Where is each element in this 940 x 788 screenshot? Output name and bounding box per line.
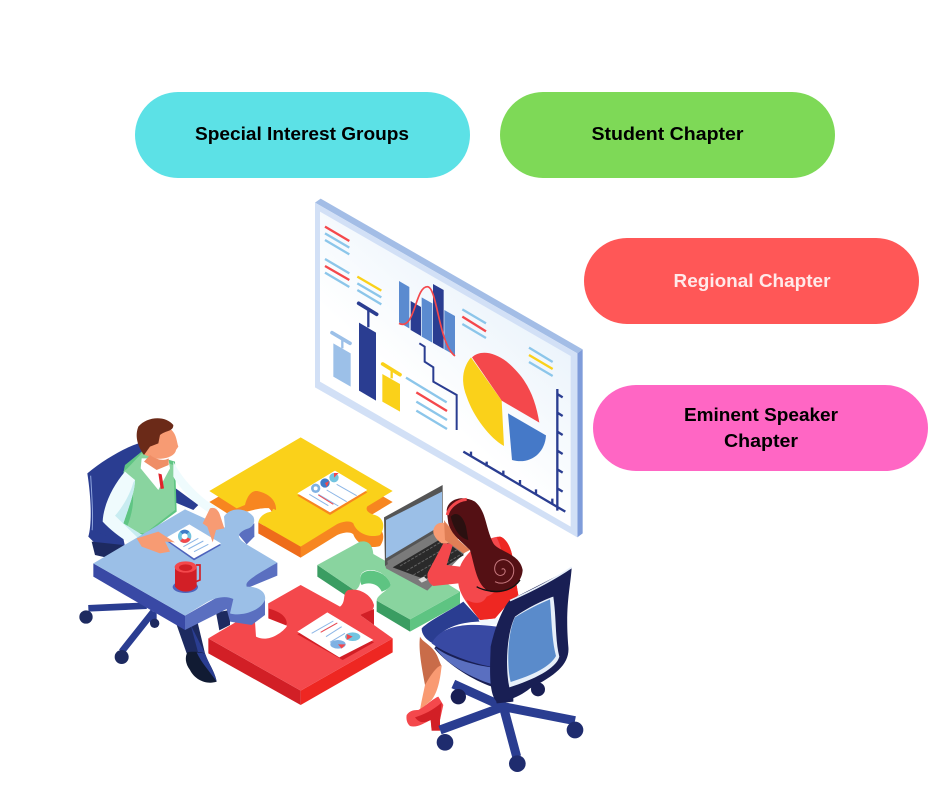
puzzle piece: yellow	[209, 437, 393, 558]
pill: Regional Chapter: Regional Chapter	[674, 271, 830, 291]
woman's office chair	[432, 567, 583, 772]
laptop	[384, 485, 467, 591]
text lines on board	[325, 227, 553, 429]
pill: Student Chapter	[500, 92, 835, 178]
pill: Student Chapter: Student Chapter	[592, 124, 744, 144]
man's hands	[137, 508, 224, 553]
chart axes	[463, 389, 565, 512]
hair	[447, 498, 523, 592]
pill: Regional Chapter	[584, 238, 919, 324]
document on yellow piece	[297, 471, 367, 515]
dashboard board with charts	[315, 199, 583, 537]
back rest	[490, 568, 572, 702]
man's chair and lower body	[79, 443, 230, 683]
table puzzle piece	[93, 508, 277, 630]
puzzle piece: green	[317, 541, 460, 632]
seat	[434, 629, 500, 687]
pill: Special Interest Groups	[135, 92, 470, 178]
pill: Eminent Speaker Chapter: Chapter	[724, 431, 798, 451]
shirt and tie	[141, 458, 170, 490]
document on table	[165, 524, 221, 560]
head	[140, 428, 178, 459]
hair bun spiral	[495, 560, 514, 583]
shoe	[406, 697, 443, 731]
woman	[406, 498, 523, 731]
pill: Eminent Speaker Chapter	[593, 385, 928, 471]
hand and face	[433, 523, 460, 543]
connector line	[419, 343, 457, 430]
document on red piece	[297, 612, 374, 660]
histogram with curve	[399, 281, 455, 356]
legs	[420, 637, 442, 685]
pill: Special Interest Groups: Special Interest Groups	[195, 124, 409, 144]
puzzle piece: red	[208, 585, 393, 705]
top	[427, 537, 518, 620]
pill: Eminent Speaker Chapter: Eminent Speaker	[684, 405, 838, 425]
pie chart	[463, 353, 546, 461]
base	[440, 684, 575, 757]
bar chart with pins	[332, 303, 400, 412]
coffee mug	[173, 561, 200, 593]
skirt	[422, 602, 482, 643]
shirt trim	[478, 616, 500, 626]
man's torso	[103, 418, 218, 548]
